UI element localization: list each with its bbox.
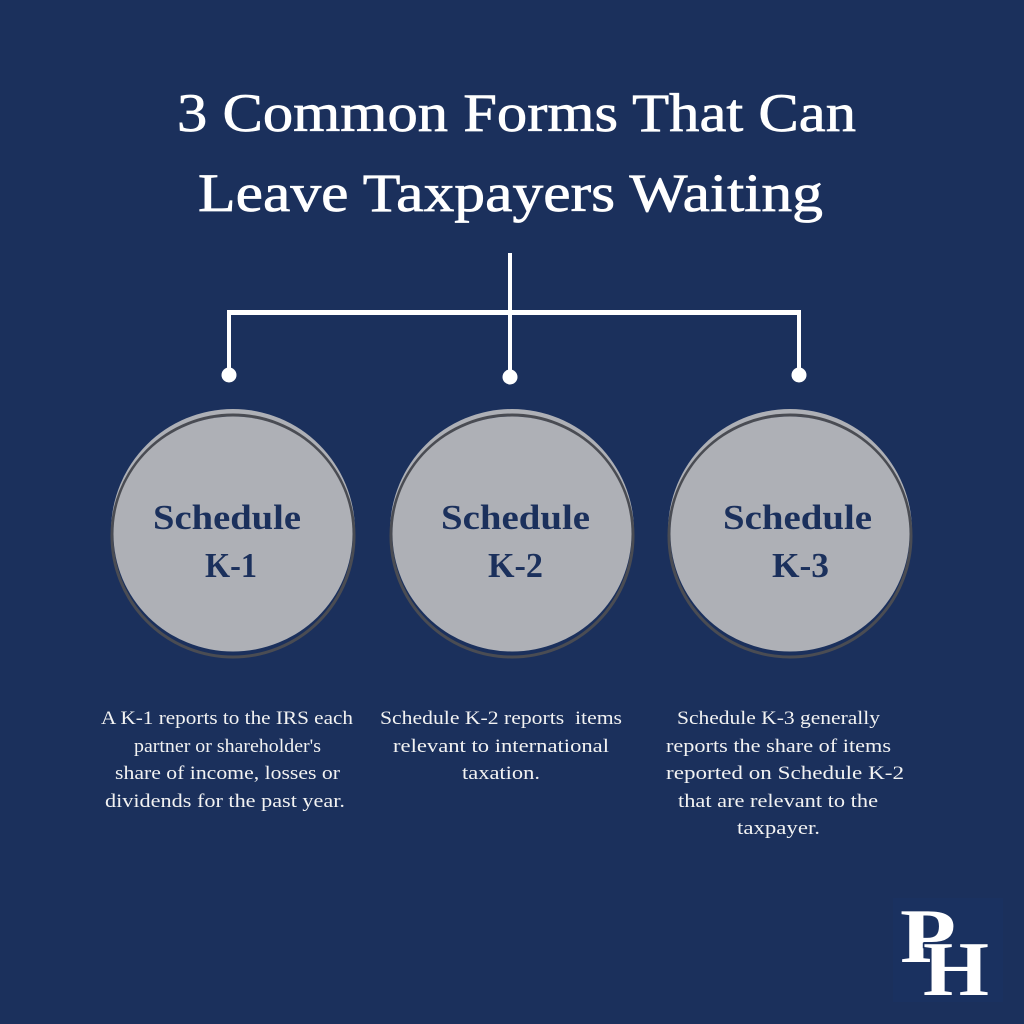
title (177, 83, 856, 223)
text block: K-1 description: dividends for the past year. (105, 791, 345, 812)
title: Leave Taxpayers Waiting (198, 163, 823, 223)
text block: K-1 description: share of income, losses or (115, 763, 341, 784)
text block: K-3 description: reports the share of items (666, 736, 891, 757)
connector diagram (222, 253, 806, 384)
text block: K-1 description: A K-1 reports to the IRS each (101, 708, 354, 729)
text block: K-1 description (101, 708, 354, 812)
panel: Schedule K-1 (111, 409, 355, 657)
panel: Schedule K-3 (668, 409, 912, 657)
logo: PH monogram: H (923, 926, 989, 1012)
logo: PH monogram (893, 893, 1003, 1012)
panel: Schedule K-3: K-3 (772, 546, 829, 585)
panel: Schedule K-1: K-1 (205, 546, 257, 585)
panel: Schedule K-2: K-2 (488, 546, 543, 585)
panel: Schedule K-3: Schedule (723, 498, 872, 537)
panel: Schedule K-2: Schedule (441, 498, 590, 537)
text block: K-2 description: taxation. (462, 763, 540, 784)
text block: K-2 description: Schedule K-2 reports items (380, 708, 622, 729)
panel: Schedule K-2 (390, 409, 634, 657)
text block: K-3 description: taxpayer. (737, 818, 820, 839)
text block: K-3 description: Schedule K-3 generally (677, 708, 881, 729)
text block: K-1 description: partner or shareholder's (134, 736, 321, 757)
logo: PH monogram: P (900, 893, 956, 979)
text block: K-2 description: relevant to international (393, 736, 609, 757)
panel: Schedule K-1: Schedule (153, 498, 301, 537)
text block: K-3 description: reported on Schedule K-2 (666, 763, 904, 784)
text block: K-3 description: that are relevant to the (678, 791, 878, 812)
text block: K-3 description (666, 708, 904, 839)
title: 3 Common Forms That Can (177, 83, 856, 143)
text block: K-2 description (380, 708, 622, 784)
